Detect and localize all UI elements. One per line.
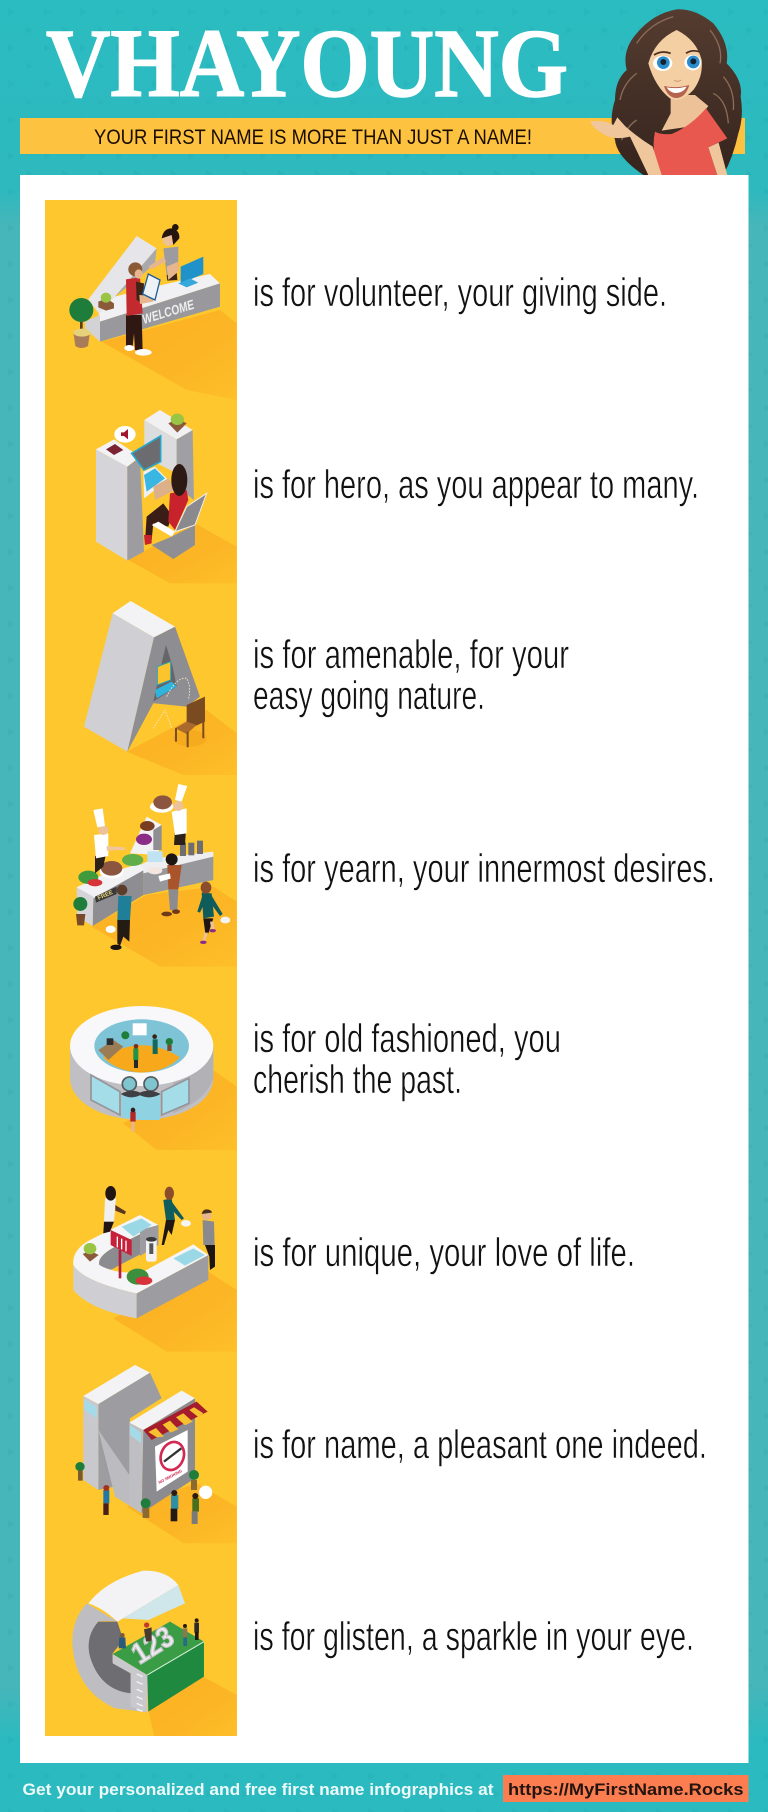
server — [202, 1209, 215, 1270]
small figures — [119, 1618, 199, 1648]
customer left — [106, 885, 132, 950]
icon: letter G green building — [72, 1571, 237, 1740]
glasses and mustache sign — [121, 1077, 161, 1097]
subtitle banner — [20, 118, 745, 154]
woman in teal — [162, 1187, 191, 1245]
icon: letter V welcome desk — [69, 224, 237, 400]
illustration column contents — [69, 224, 237, 1740]
icon: letter U cafe counter — [73, 1186, 237, 1352]
no smoking poster: NO SMOKING — [157, 1468, 183, 1485]
icon: letter Y buffet — [73, 784, 237, 967]
receptionist — [148, 224, 179, 281]
plants — [75, 1462, 199, 1518]
chef left — [93, 808, 125, 873]
yellow illustration column — [45, 200, 237, 1736]
row 3 text: is for amenable, for your — [253, 633, 569, 677]
subtitle banner: YOUR FIRST NAME IS MORE THAN JUST A NAME! — [94, 125, 532, 149]
illustration: cartoon woman presenting — [590, 9, 742, 175]
icon: letter N no smoking storefront — [75, 1365, 237, 1543]
small figures — [103, 1485, 199, 1524]
icon: letter O optical shop — [70, 1006, 237, 1150]
shop interior — [98, 1023, 173, 1068]
potted tree — [69, 298, 93, 348]
customer centre — [148, 853, 182, 916]
customer right — [197, 882, 230, 944]
row 5 text: cherish the past. — [253, 1058, 462, 1102]
row 3 text: easy going nature. — [253, 674, 485, 718]
icon: letter G green building: 123 — [126, 1620, 180, 1671]
striped awning — [143, 1402, 208, 1440]
row 5 text — [253, 1017, 561, 1102]
red cutlery sign — [111, 1230, 132, 1278]
woman in white — [103, 1186, 126, 1233]
visitor with clipboard — [124, 262, 160, 356]
chef right with roast — [150, 784, 187, 845]
footer call to action: Get your personalized and free first name infographics at — [22, 1780, 494, 1799]
footer url badge: https://MyFirstName.Rocks — [508, 1780, 744, 1799]
row 3 text — [253, 633, 569, 718]
row 6 text: is for unique, your love of life. — [253, 1231, 635, 1275]
icon: letter A workstation — [84, 601, 237, 775]
footer url badge — [503, 1775, 748, 1802]
row 5 text: is for old fashioned, you — [253, 1017, 561, 1061]
title: VHAYOUNG — [46, 10, 568, 118]
seated woman and chair — [144, 464, 207, 559]
food displays — [78, 821, 203, 886]
no smoking poster — [155, 1430, 188, 1492]
icon: letter H office booth — [96, 410, 237, 583]
icon: letter Y buffet: FREE — [97, 890, 114, 902]
wooden chair — [175, 697, 205, 747]
icon: letter V welcome desk: WELCOME — [140, 297, 197, 327]
shop windows and door — [91, 1075, 189, 1120]
